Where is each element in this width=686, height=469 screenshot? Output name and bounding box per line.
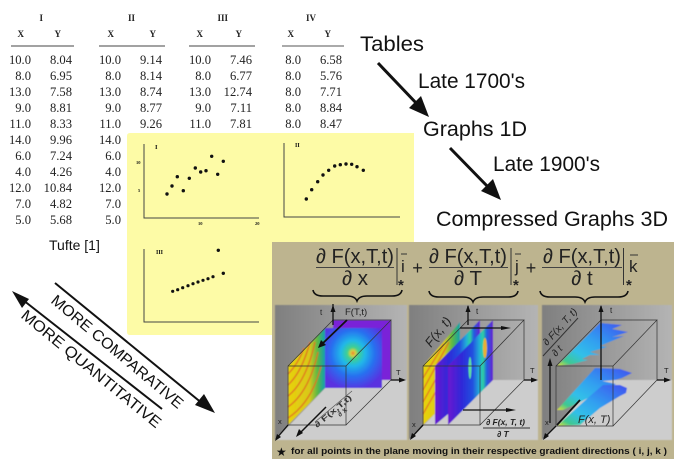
table III: 8.0: [195, 69, 211, 83]
brace under term 2: [429, 291, 518, 302]
3D graph: slices over t: T: [664, 366, 669, 375]
3D graph: spatial gradient: t: [320, 308, 323, 317]
table IV: [282, 13, 344, 131]
table II: 9.0: [105, 101, 121, 115]
table IV: 8.47: [320, 117, 342, 131]
table I: Y: [54, 29, 62, 39]
3D graph: slices over t: [541, 305, 672, 440]
equation term: d/dt: *: [626, 277, 632, 294]
table I: 11.0: [9, 117, 31, 131]
table I: 6.95: [50, 69, 72, 83]
3D graph: spatial gradient: x: [278, 417, 282, 426]
table III: 7.11: [230, 101, 252, 115]
equation term: d/dT: [429, 245, 521, 294]
table III: 6.77: [230, 69, 252, 83]
table II: 10.0: [99, 53, 121, 67]
table III: 12.74: [224, 85, 253, 99]
3D graph: slices over T: [409, 305, 538, 440]
3D graph: slices over T: ∂ F(x, T, t): [486, 417, 525, 427]
table I: 4.0: [15, 165, 31, 179]
table I: 4.26: [50, 165, 72, 179]
olive panel: gradient equation and 3D graphs: [272, 242, 674, 459]
equation term: d/dt: ∂ F(x,T,t): [543, 245, 621, 268]
table I: X: [18, 29, 24, 39]
3D graph: spatial gradient: T: [396, 368, 401, 377]
equation term: d/dx: ∂ F(x,T,t): [316, 245, 394, 268]
arrow: graphs to compressed graphs: [450, 148, 501, 200]
table II: 6.0: [105, 149, 121, 163]
table III: 13.0: [189, 85, 211, 99]
table I: 8.0: [15, 69, 31, 83]
table I: 10.0: [9, 53, 31, 67]
equation term: d/dx: i: [401, 257, 405, 276]
label: more comparative: MORE COMPARATIVE: [47, 292, 186, 412]
table II: 8.74: [140, 85, 163, 99]
table II: II: [128, 13, 135, 23]
3D graph: spatial gradient: F(T,t): [345, 307, 367, 318]
3D graph: spatial gradient: ∂ x: [336, 405, 350, 419]
table I: 14.0: [9, 133, 31, 147]
equation term: d/dT: *: [513, 277, 519, 294]
table IV: 8.0: [285, 53, 301, 67]
table III: X: [196, 29, 204, 39]
table II: 12.0: [99, 181, 121, 195]
table I: 6.0: [15, 149, 31, 163]
scatter plot I: 10: [198, 221, 203, 226]
heading: Tables: Tables: [360, 33, 424, 56]
label: more quantitative: MORE QUANTITATIVE: [17, 307, 164, 432]
table II: 9.26: [140, 117, 162, 131]
scatter plot I: [136, 144, 260, 226]
equation term: d/dx: [316, 245, 407, 294]
equation term: d/dt: [542, 245, 638, 294]
yellow panel: scatter plots: [127, 133, 414, 335]
arrow: more comparative: [55, 283, 215, 413]
scatter plot I: I: [155, 144, 158, 151]
heading: Compressed Graphs 3D: Compressed Graphs 3D: [436, 208, 668, 231]
citation: Tufte [1]: Tufte [1]: [49, 237, 100, 253]
table II: 14.0: [99, 133, 121, 147]
scatter plot I: 10: [136, 160, 141, 165]
table II: 5.0: [105, 213, 121, 227]
table I: 12.0: [9, 181, 31, 195]
table IV: 8.0: [285, 101, 301, 115]
3D graph: slices over t: ∂ F(x, T, t): [541, 306, 580, 348]
equation term: d/dT: j: [514, 257, 519, 276]
table III: III: [217, 13, 228, 23]
table III: 10.0: [189, 53, 211, 67]
table II: 8.0: [105, 69, 121, 83]
table IV: Y: [324, 29, 332, 39]
table I: 7.58: [50, 85, 72, 99]
table IV: 7.71: [320, 85, 342, 99]
table I: [9, 13, 74, 227]
scatter plot II: [284, 143, 400, 217]
arrow: more quantitative: [12, 291, 162, 409]
table II: 11.0: [99, 117, 121, 131]
heading: Late 1700's: Late 1700's: [418, 70, 525, 93]
scatter plot I: 20: [255, 221, 260, 226]
brace under term 1: [313, 290, 402, 301]
equation term: d/dt: ∂ t: [571, 267, 593, 290]
table IV: 6.58: [320, 53, 342, 67]
table IV: 8.0: [285, 85, 301, 99]
heading: Late 1900's: Late 1900's: [493, 153, 600, 176]
brace under term 3: [540, 291, 628, 302]
footnote text: for all points in the plane moving in their respective gradient directions ( i, j, k ): [291, 446, 667, 456]
heading: Graphs 1D: Graphs 1D: [423, 118, 527, 141]
equation term: d/dt: k: [629, 257, 638, 276]
equation term: d/dT: ∂ T: [454, 267, 482, 290]
table I: 8.33: [50, 117, 72, 131]
table I: I: [39, 13, 43, 23]
table I: 8.04: [50, 53, 73, 67]
table IV: X: [288, 29, 294, 39]
table II: 9.14: [140, 53, 163, 67]
plus sign: +: [412, 258, 423, 278]
table I: 13.0: [9, 85, 31, 99]
table I: 5.68: [50, 213, 72, 227]
table II: 4.0: [105, 165, 121, 179]
table I: 10.84: [44, 181, 73, 195]
3D graph: slices over t: F(x, T): [578, 414, 611, 426]
table II: 13.0: [99, 85, 121, 99]
scatter plot I: 5: [138, 188, 141, 193]
table IV: 8.0: [285, 117, 301, 131]
table I: 8.81: [50, 101, 72, 115]
table I: 7.24: [50, 149, 73, 163]
table II: Y: [150, 29, 156, 39]
data tables: Anscombe quartet: [9, 13, 344, 227]
plus sign: +: [526, 258, 536, 278]
3D graph: spatial gradient: [275, 304, 407, 441]
table IV: 5.76: [320, 69, 342, 83]
scatter plot III: III: [156, 250, 164, 256]
3D graph: slices over T: x: [412, 420, 416, 429]
table II: [99, 13, 165, 227]
table III: 7.81: [230, 117, 252, 131]
table III: 7.46: [230, 53, 252, 67]
table III: 11.0: [189, 117, 211, 131]
3D graph: spatial gradient: ∂ F(x,T,t): [313, 393, 354, 430]
table IV: IV: [306, 13, 316, 23]
table I: 4.82: [50, 197, 72, 211]
footnote text: ★: [276, 445, 287, 459]
footnote text: [276, 445, 667, 459]
table I: 9.0: [15, 101, 31, 115]
table IV: 8.84: [320, 101, 343, 115]
3D graph: slices over T: ∂ T: [497, 429, 510, 439]
table I: 9.96: [50, 133, 72, 147]
table III: 9.0: [195, 101, 211, 115]
scatter plot III: [144, 249, 259, 322]
arrow: tables to graphs: [378, 63, 429, 117]
3D graph: slices over t: x: [545, 418, 549, 427]
table I: 7.0: [15, 197, 31, 211]
table III: [189, 13, 255, 131]
table II: 8.77: [140, 101, 162, 115]
3D graph: slices over t: ∂ t: [550, 343, 566, 359]
table II: 8.14: [140, 69, 163, 83]
3D graph: slices over T: F(x, t): [422, 314, 454, 350]
table II: 7.0: [105, 197, 121, 211]
equation term: d/dx: ∂ x: [342, 267, 369, 290]
table II: X: [108, 29, 114, 39]
table IV: 8.0: [285, 69, 301, 83]
3D graph: slices over T: t: [476, 307, 479, 316]
equation term: d/dT: ∂ F(x,T,t): [429, 245, 507, 268]
table III: Y: [236, 29, 242, 39]
table I: 5.0: [15, 213, 31, 227]
equation term: d/dx: *: [398, 277, 404, 294]
3D graph: slices over T: T: [530, 366, 535, 375]
scatter plot II: II: [295, 143, 300, 149]
3D graph: slices over t: t: [610, 306, 613, 315]
